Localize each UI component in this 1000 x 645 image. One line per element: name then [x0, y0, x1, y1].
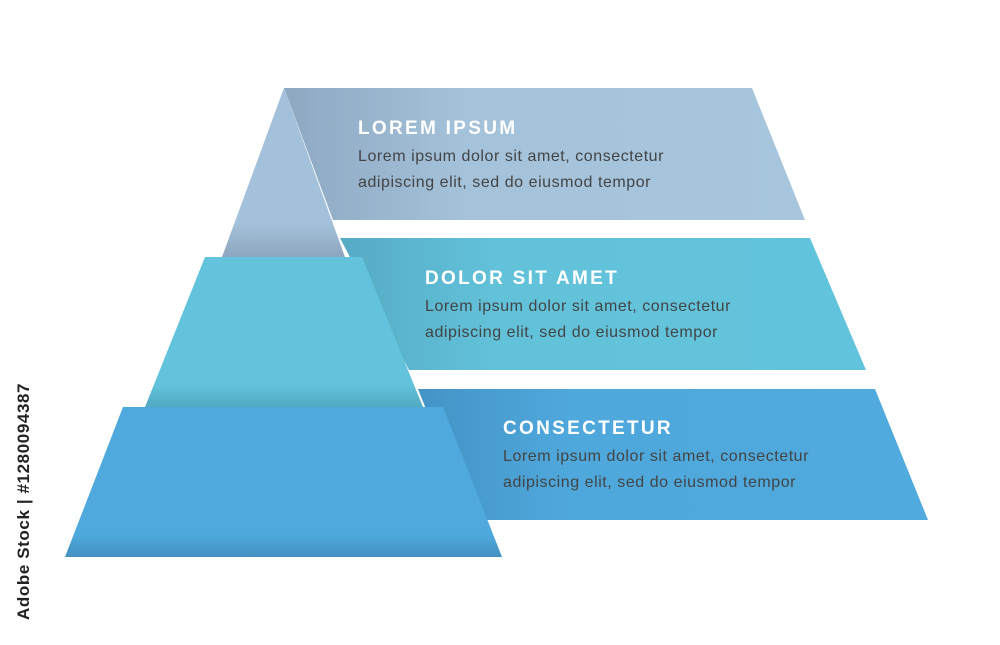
text 1: adipiscing elit, sed do eiusmod tempor — [358, 174, 651, 191]
text 3: Lorem ipsum dolor sit amet, consectetur — [503, 448, 809, 465]
pyramid piece 3 — [65, 407, 502, 557]
tier 1: lorem ipsum — [222, 88, 805, 257]
text 2: DOLOR SIT AMET — [425, 268, 619, 289]
pyramid piece 1 — [222, 88, 345, 257]
tier 2: dolor sit amet — [145, 238, 866, 407]
text 2: adipiscing elit, sed do eiusmod tempor — [425, 324, 718, 341]
text 3: adipiscing elit, sed do eiusmod tempor — [503, 474, 796, 491]
pyramid piece 2 — [145, 257, 423, 407]
text 3 — [503, 418, 809, 491]
band 3 — [418, 389, 928, 520]
side id text: Adobe Stock | #1280094387 — [14, 383, 33, 620]
text 1 — [358, 118, 664, 191]
band 1 — [284, 88, 805, 220]
text 1: Lorem ipsum dolor sit amet, consectetur — [358, 148, 664, 165]
text 2 — [425, 268, 731, 341]
text 1: LOREM IPSUM — [358, 118, 517, 139]
text 2: Lorem ipsum dolor sit amet, consectetur — [425, 298, 731, 315]
band 2 — [340, 238, 866, 370]
tier 3: consectetur — [65, 389, 928, 557]
text 3: CONSECTETUR — [503, 418, 673, 439]
